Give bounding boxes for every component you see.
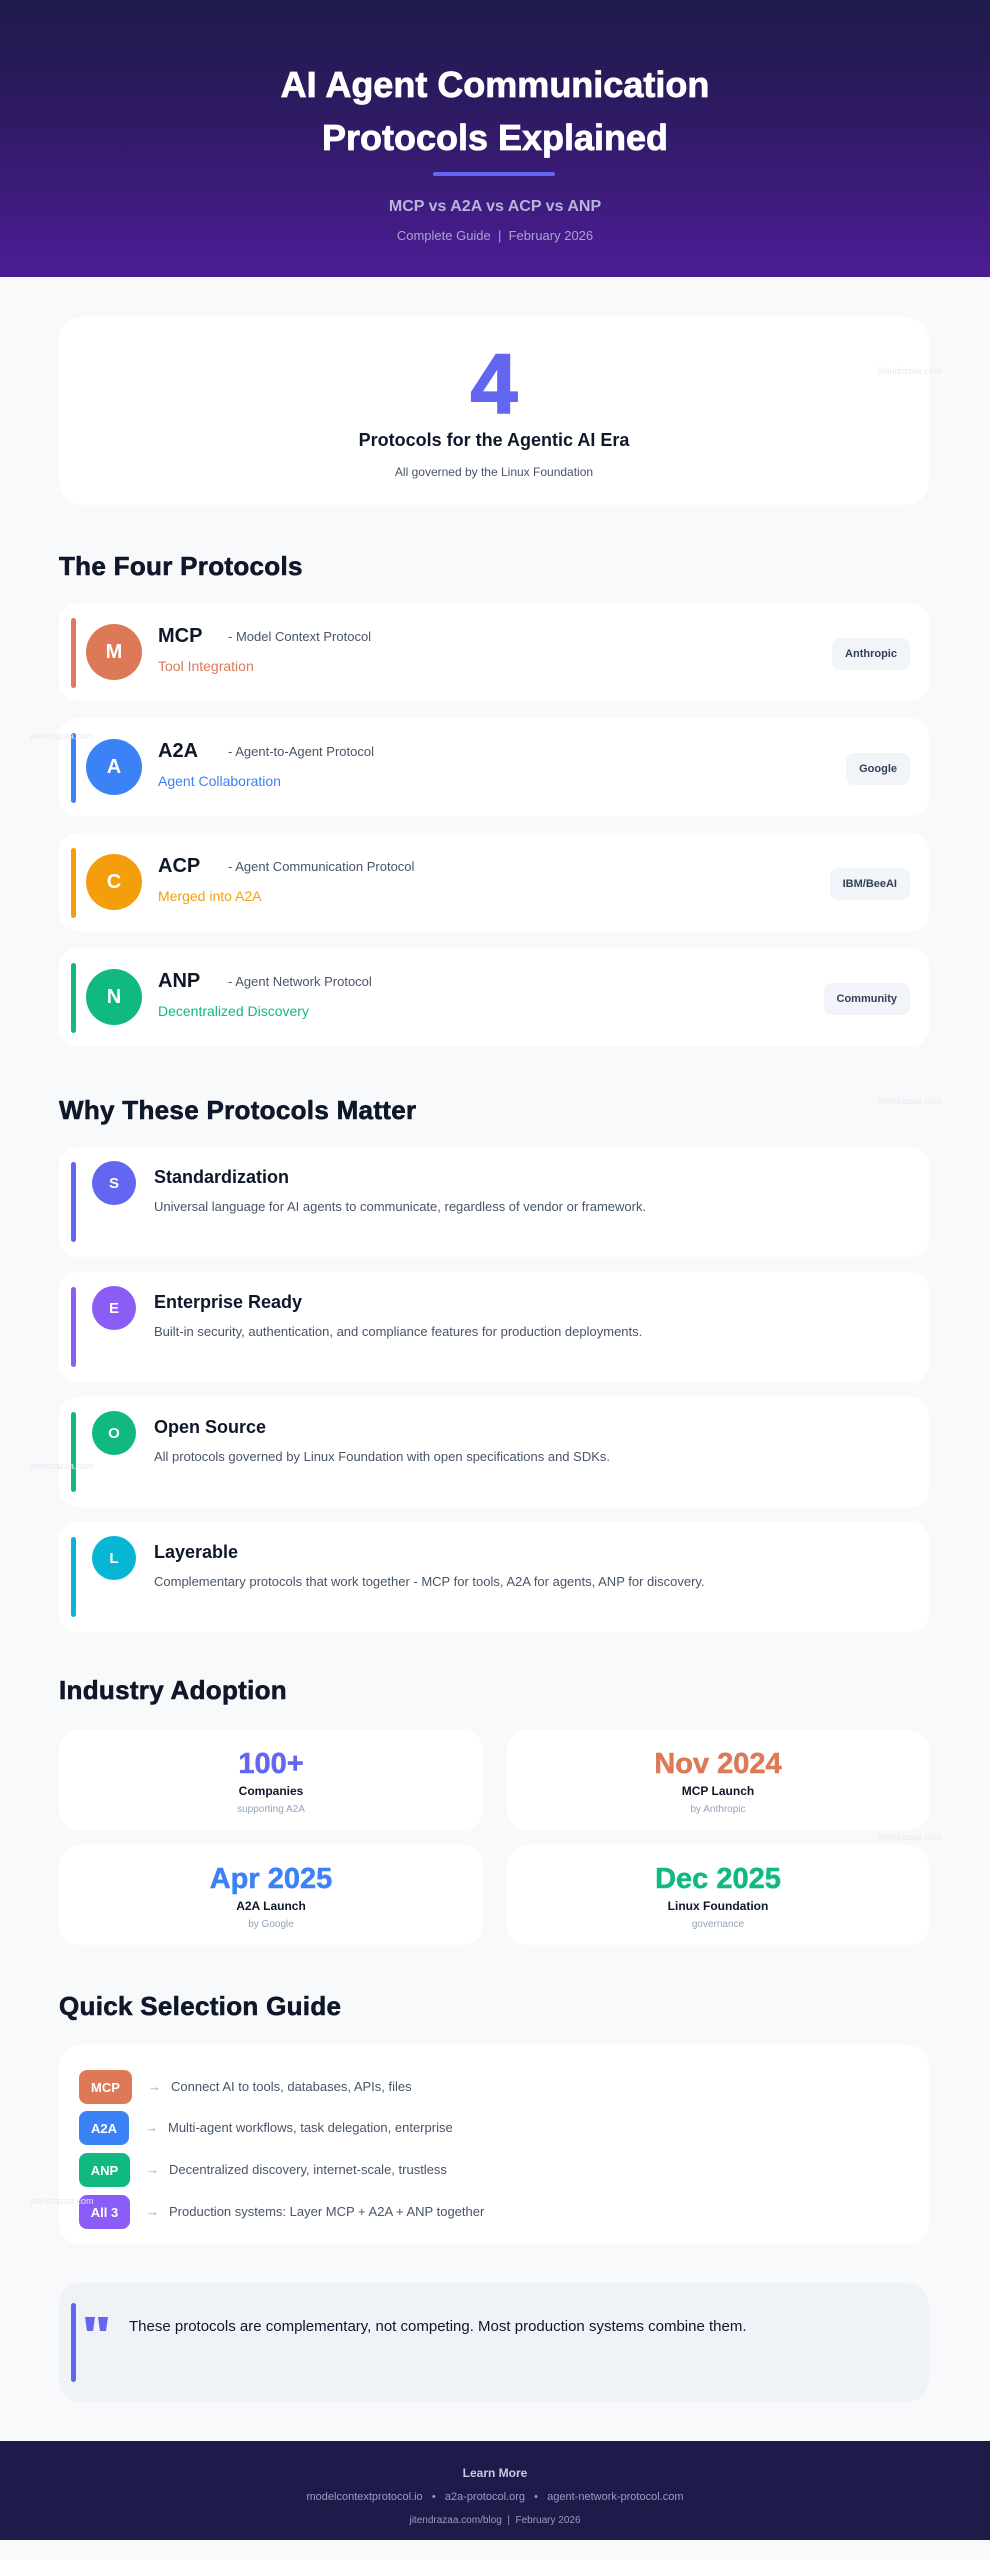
- callout quote: [59, 2283, 929, 2402]
- footer: modelcontextprotocol.io • a2a-protocol.org • agent-network-protocol.com: [306, 2491, 684, 2503]
- panel: ACP: - Agent Communication Protocol: [228, 859, 414, 874]
- icon: S: [92, 1161, 136, 1205]
- icon: M: [86, 624, 142, 680]
- panel: standardization: [59, 1147, 929, 1257]
- date line: Complete Guide | February 2026: [397, 228, 593, 243]
- row: ANP: [79, 2153, 447, 2187]
- stat: companies: supporting A2A: [237, 1804, 305, 1815]
- icon: A: [86, 739, 142, 795]
- row: All 3: [79, 2195, 484, 2229]
- badge: Community: [836, 993, 897, 1005]
- panel: ANP: - Agent Network Protocol: [228, 974, 372, 989]
- stat: A2A launch: by Google: [248, 1919, 294, 1930]
- hero stat card: [59, 317, 929, 505]
- panel: enterprise: Built-in security, authentication, and compliance features for production deployments.: [154, 1324, 642, 1339]
- icon: N: N: [107, 986, 121, 1008]
- panel: open source: [59, 1397, 929, 1507]
- text: jitendrazaa.com: [878, 1832, 942, 1842]
- panel: MCP: [59, 603, 929, 701]
- heading: why: Why These Protocols Matter: [59, 1095, 416, 1125]
- badge: [832, 638, 910, 670]
- panel: ACP: Merged into A2A: [158, 888, 262, 904]
- panel: selection guide: [59, 2045, 929, 2244]
- row: A2A: Multi-agent workflows, task delegation, enterprise: [168, 2120, 453, 2135]
- panel: open source: Open Source: [154, 1417, 266, 1437]
- text: jitendrazaa.com: [878, 1096, 942, 1106]
- stat: MCP launch: by Anthropic: [690, 1804, 746, 1815]
- title: AI Agent Communication: [281, 64, 709, 105]
- panel: ACP: [59, 833, 929, 931]
- panel: enterprise: [59, 1272, 929, 1382]
- panel: open source: All protocols governed by Linux Foundation with open specifications and SDKs.: [154, 1449, 610, 1464]
- panel: layerable: Complementary protocols that work together - MCP for tools, A2A for agents, ANP for discovery.: [154, 1574, 705, 1589]
- text: jitendrazaa.com: [878, 366, 942, 376]
- panel: A2A: - Agent-to-Agent Protocol: [228, 744, 374, 759]
- row: ANP: Decentralized discovery, internet-scale, trustless: [169, 2162, 447, 2177]
- badge: [830, 868, 910, 900]
- stat: A2A launch: [59, 1845, 483, 1945]
- stat: Linux Foundation: Dec 2025: [655, 1863, 781, 1895]
- badge: Google: [859, 763, 897, 775]
- text: jitendrazaa.com: [30, 2196, 94, 2206]
- panel: A2A: Agent Collaboration: [158, 773, 281, 789]
- heading: adoption: Industry Adoption: [59, 1675, 287, 1705]
- icon: N: [86, 969, 142, 1025]
- text: jitendrazaa.com: [30, 731, 94, 741]
- panel: MCP: MCP: [158, 625, 202, 647]
- icon: E: E: [109, 1300, 119, 1316]
- stat: A2A launch: Apr 2025: [210, 1863, 332, 1895]
- big number: 4: [471, 337, 517, 431]
- row: All 3: Production systems: Layer MCP + A2A + ANP together: [169, 2204, 484, 2219]
- row: All 3: →: [146, 2204, 159, 2219]
- footer: jitendrazaa.com/blog | February 2026: [409, 2515, 581, 2526]
- stat: A2A launch: A2A Launch: [236, 1899, 306, 1913]
- panel: standardization: Standardization: [154, 1167, 289, 1187]
- panel: MCP: Tool Integration: [158, 658, 254, 674]
- title underline: [433, 172, 555, 176]
- icon: C: C: [107, 870, 121, 892]
- icon: C: [86, 854, 142, 910]
- panel: layerable: [59, 1522, 929, 1632]
- stat: companies: [59, 1730, 483, 1830]
- row: MCP: MCP: [91, 2080, 120, 2094]
- heading: four protocols: The Four Protocols: [59, 551, 303, 581]
- panel: A2A: [59, 718, 929, 816]
- row: ANP: →: [146, 2162, 159, 2177]
- icon: O: O: [108, 1424, 120, 1442]
- stat: MCP launch: MCP Launch: [682, 1784, 754, 1798]
- badge: [846, 753, 910, 785]
- row: MCP: →: [148, 2079, 161, 2094]
- panel: A2A: A2A: [158, 740, 198, 762]
- panel: ANP: ANP: [158, 970, 200, 992]
- header banner: [0, 0, 990, 277]
- icon: S: S: [109, 1174, 119, 1192]
- row: All 3: All 3: [91, 2204, 118, 2220]
- row: ANP: ANP: [91, 2162, 118, 2178]
- title: Protocols Explained: [322, 117, 668, 158]
- text: jitendrazaa.com: [30, 1461, 94, 1471]
- badge: Anthropic: [845, 648, 897, 660]
- panel: layerable: Layerable: [154, 1542, 238, 1562]
- stat: Linux Foundation: Linux Foundation: [668, 1899, 768, 1913]
- icon: M: M: [106, 640, 122, 662]
- title: [281, 64, 709, 158]
- stat: MCP launch: [507, 1730, 929, 1830]
- hero sublabel: All governed by the Linux Foundation: [395, 465, 593, 479]
- badge: [824, 983, 910, 1015]
- subtitle: MCP vs A2A vs ACP vs ANP: [389, 198, 601, 215]
- icon: L: [92, 1536, 136, 1580]
- row: MCP: Connect AI to tools, databases, APIs, files: [171, 2079, 412, 2094]
- icon: L: L: [109, 1550, 119, 1566]
- icon: O: [92, 1411, 136, 1455]
- row: A2A: A2A: [91, 2120, 117, 2136]
- stat: companies: Companies: [239, 1784, 303, 1798]
- panel: enterprise: Enterprise Ready: [154, 1292, 302, 1312]
- callout quote: These protocols are complementary, not competing. Most production systems combine them.: [129, 2318, 746, 2335]
- stat: Linux Foundation: [507, 1845, 929, 1945]
- row: A2A: →: [145, 2120, 158, 2135]
- row: A2A: [79, 2111, 453, 2145]
- panel: MCP: - Model Context Protocol: [228, 629, 371, 644]
- panel: ACP: ACP: [158, 855, 200, 877]
- icon: quote mark: [85, 2317, 108, 2331]
- heading: quick selection: Quick Selection Guide: [59, 1991, 341, 2021]
- icon: E: [92, 1286, 136, 1330]
- hero label: Protocols for the Agentic AI Era: [359, 430, 629, 450]
- badge: IBM/BeeAI: [843, 878, 897, 890]
- panel: ANP: Decentralized Discovery: [158, 1003, 309, 1019]
- stat: Linux Foundation: governance: [692, 1919, 744, 1930]
- footer: Learn More: [463, 2466, 527, 2480]
- row: MCP: [79, 2070, 412, 2104]
- stat: companies: 100+: [238, 1748, 304, 1780]
- icon: A: A: [107, 756, 121, 778]
- panel: standardization: Universal language for AI agents to communicate, regardless of vendor or framework.: [154, 1199, 646, 1214]
- panel: ANP: [59, 948, 929, 1046]
- footer: [0, 2441, 990, 2540]
- stat: MCP launch: Nov 2024: [654, 1748, 782, 1780]
